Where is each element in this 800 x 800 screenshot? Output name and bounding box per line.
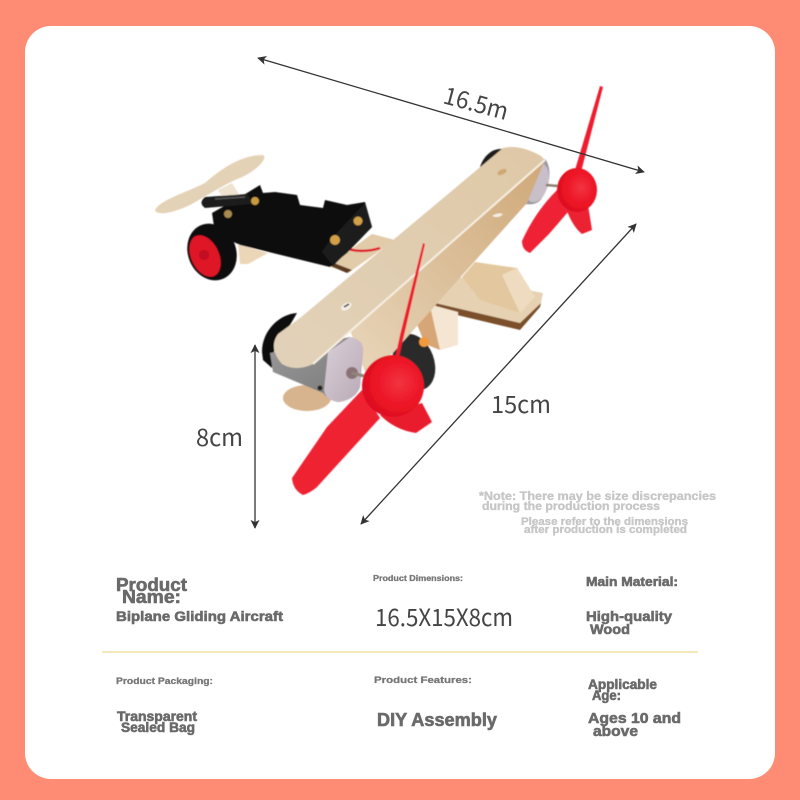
length label: 15cm [491, 385, 551, 420]
product name: Name: [122, 587, 181, 607]
applicable age: Age: [592, 688, 621, 703]
size discrepancy note: during the production process [482, 501, 660, 513]
product dimensions: Product Dimensions: [373, 574, 463, 583]
applicable age: Applicable [588, 677, 657, 692]
applicable age [588, 677, 681, 740]
product packaging [116, 676, 213, 735]
size discrepancy note: *Note: There may be size discrepancies [479, 491, 716, 503]
support post [416, 305, 458, 350]
far motor wheel [480, 149, 508, 175]
product name: Biplane Gliding Aircraft [116, 608, 283, 624]
height dimension arrow [254, 345, 256, 528]
main material: Wood [590, 621, 630, 637]
main material: Main Material: [586, 574, 678, 589]
product features: DIY Assembly [377, 710, 497, 730]
product packaging: Transparent [117, 709, 198, 724]
size discrepancy note: Please refer to the dimensions [521, 516, 688, 528]
product features [374, 675, 497, 730]
tail base plate [435, 277, 543, 330]
red wire [345, 247, 380, 251]
product packaging: Product Packaging: [116, 676, 213, 686]
wooden disc [283, 385, 331, 411]
wooden rear propeller [155, 155, 264, 213]
height label: 8cm [196, 418, 243, 453]
product features: Product Features: [374, 675, 472, 686]
product name: Product [116, 575, 187, 595]
main material [586, 574, 678, 637]
product dimensions [373, 574, 513, 633]
far motor [500, 155, 549, 204]
size discrepancy note [479, 491, 716, 536]
main material: High-quality [586, 608, 672, 624]
aircraft photo illustration [155, 86, 603, 495]
far motor shaft [546, 185, 558, 186]
brass contacts [251, 197, 259, 205]
near motor [270, 337, 364, 402]
tail fin block [462, 262, 535, 313]
lower wing [350, 160, 545, 372]
small wood hub block [218, 183, 240, 204]
product dimensions: 16.5X15X8cm [375, 598, 513, 633]
rear wheel [179, 216, 245, 288]
upper wing [274, 147, 545, 368]
right red propeller [522, 86, 603, 253]
width label: 16.5m [440, 76, 513, 127]
orange peg [419, 337, 429, 347]
battery holder [202, 185, 372, 267]
applicable age: above [593, 723, 638, 740]
size discrepancy note: after production is completed [524, 524, 687, 536]
length dimension arrow [361, 224, 636, 524]
product packaging: Sealed Bag [121, 720, 195, 735]
applicable age: Ages 10 and [588, 710, 681, 727]
product name [116, 575, 283, 624]
tail wood block [238, 244, 268, 264]
near red propeller [292, 243, 432, 495]
near motor wheel [262, 313, 297, 368]
near tyre [385, 328, 443, 396]
width dimension arrow [258, 58, 644, 172]
fuselage stick [328, 234, 395, 273]
